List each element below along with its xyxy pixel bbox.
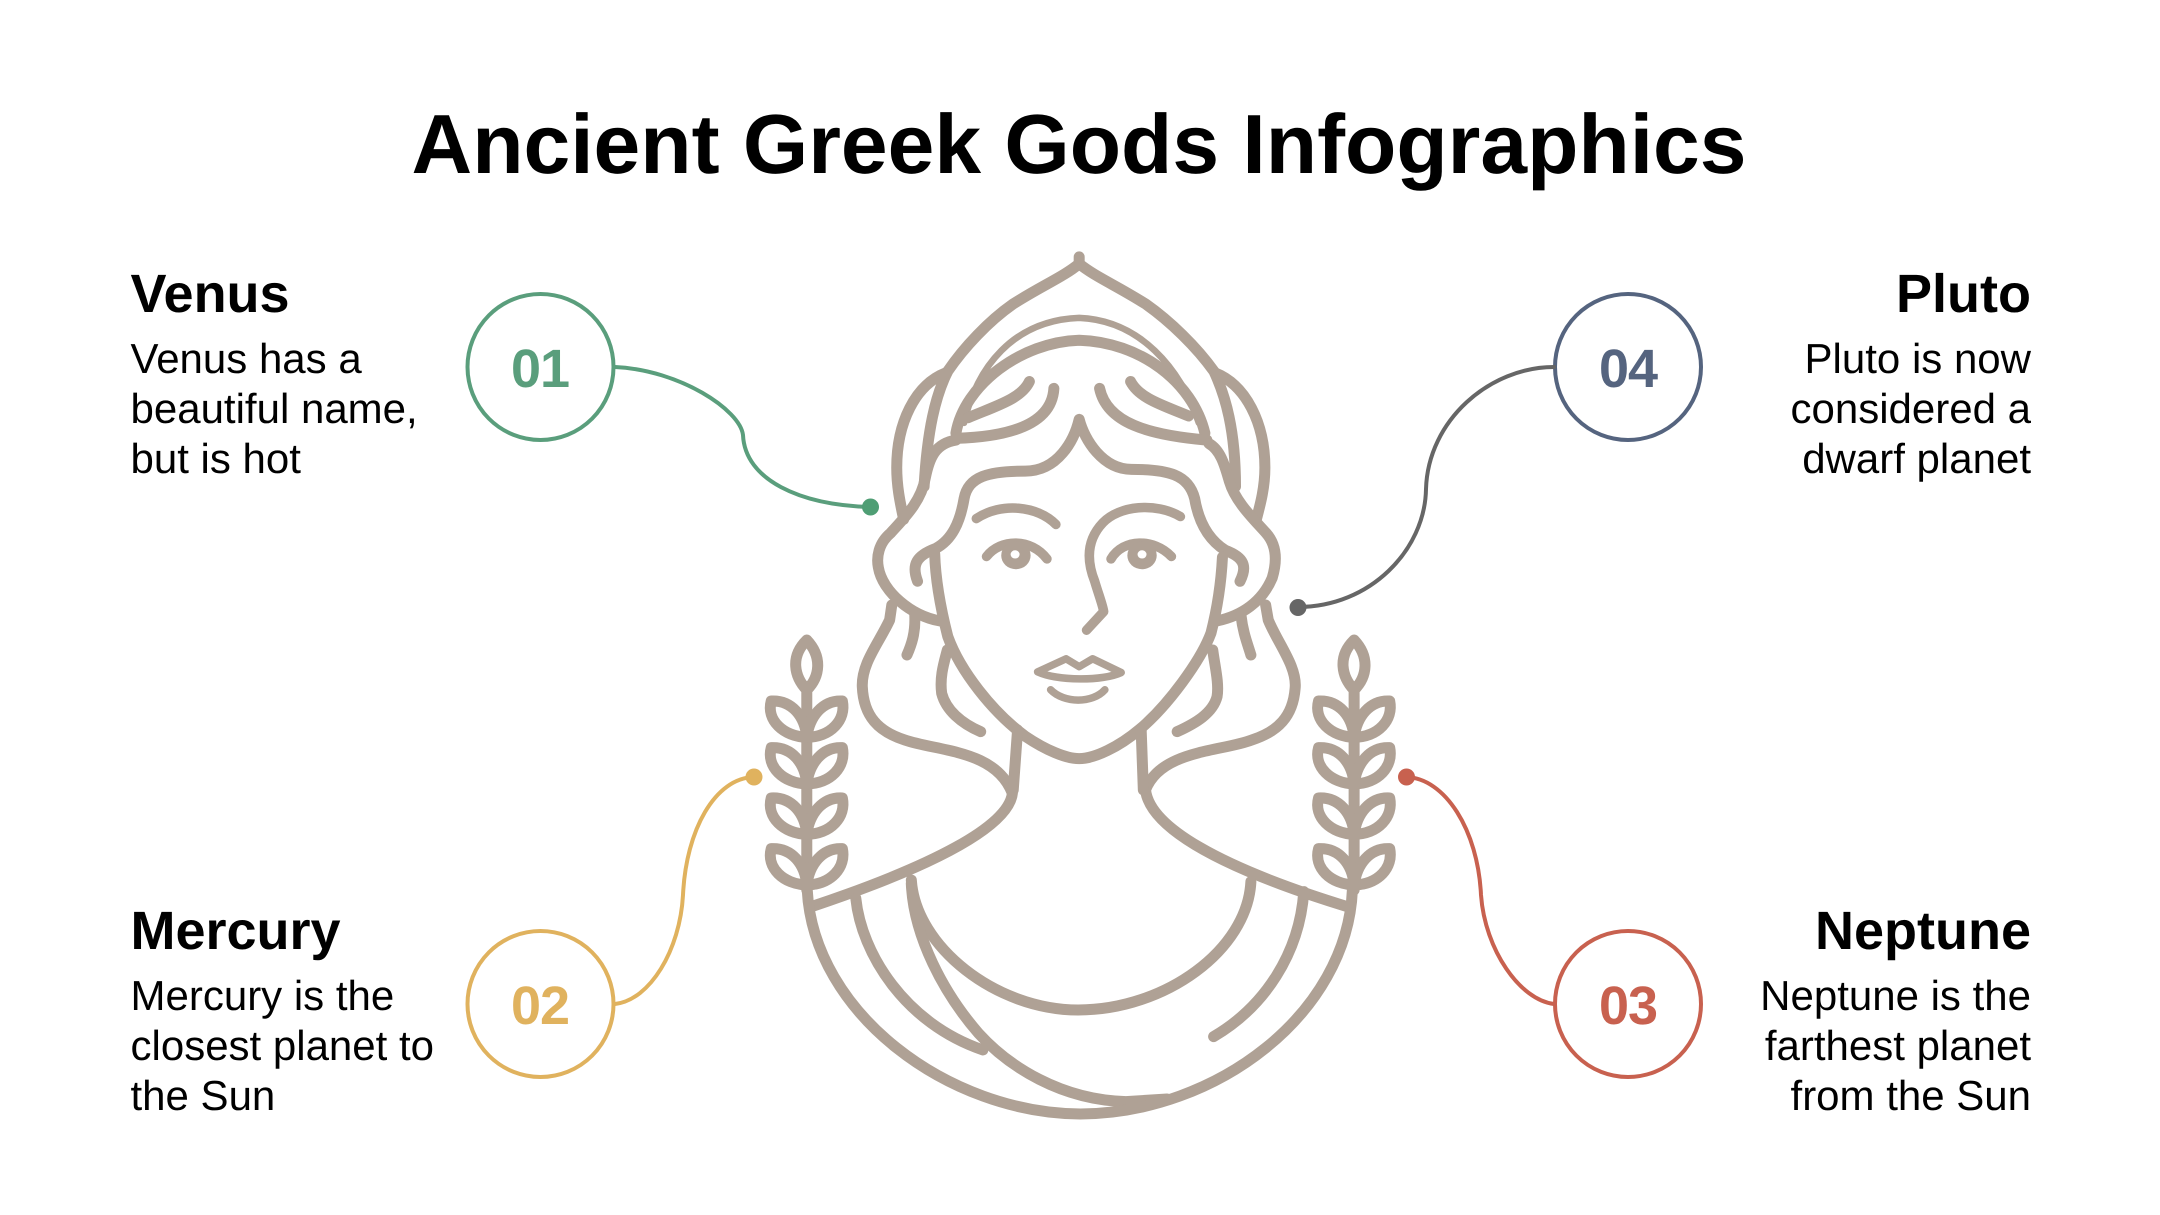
eyes bbox=[987, 543, 1171, 559]
number circle 02: 02 bbox=[511, 976, 569, 1036]
lips bbox=[1038, 659, 1121, 700]
number circle 02 bbox=[468, 931, 614, 1077]
illustration: goddess bust bbox=[770, 257, 1390, 1114]
text: pluto description: dwarf planet bbox=[1802, 435, 2031, 482]
number circle 03 bbox=[1555, 931, 1701, 1077]
head and hood bbox=[878, 257, 1275, 759]
face outline bbox=[935, 554, 1222, 759]
brows and nose bbox=[976, 507, 1180, 630]
number circle 04: 04 bbox=[1599, 339, 1658, 399]
text: neptune description: Neptune is the bbox=[1760, 972, 2031, 1019]
lower hair, neck and robe bbox=[770, 605, 1390, 1114]
text: neptune description: farthest planet bbox=[1765, 1022, 2031, 1069]
panel: venus bbox=[130, 264, 879, 516]
heading: mercury: Mercury bbox=[130, 901, 341, 961]
heading: pluto: Pluto bbox=[1896, 264, 2031, 324]
text: venus description: but is hot bbox=[130, 435, 301, 482]
connector 02 bbox=[615, 768, 762, 1004]
wheat right bbox=[1318, 640, 1390, 890]
text: mercury description: the Sun bbox=[130, 1072, 275, 1119]
heading: neptune: Neptune bbox=[1815, 901, 2031, 961]
panel: neptune bbox=[1398, 768, 2031, 1119]
text: venus description: Venus has a bbox=[130, 335, 362, 382]
number circle 01 bbox=[468, 294, 614, 440]
heading: venus: Venus bbox=[130, 264, 290, 324]
number circle 03: 03 bbox=[1599, 976, 1657, 1036]
panel: pluto bbox=[1290, 264, 2032, 616]
number circle 04 bbox=[1555, 294, 1701, 440]
text: venus description: beautiful name, bbox=[130, 385, 418, 432]
connector 04 bbox=[1290, 367, 1554, 616]
connector 01 bbox=[615, 367, 879, 516]
text: pluto description: Pluto is now bbox=[1805, 335, 2032, 382]
panel: mercury bbox=[130, 768, 762, 1119]
text: neptune description: from the Sun bbox=[1791, 1072, 2031, 1119]
text: mercury description: closest planet to bbox=[130, 1022, 434, 1069]
wheat left bbox=[770, 640, 843, 890]
connector 03 bbox=[1398, 768, 1554, 1004]
number circle 01: 01 bbox=[511, 339, 569, 399]
text: mercury description: Mercury is the bbox=[130, 972, 394, 1019]
title: Ancient Greek Gods Infographics bbox=[412, 97, 1746, 191]
text: pluto description: considered a bbox=[1790, 385, 2032, 432]
